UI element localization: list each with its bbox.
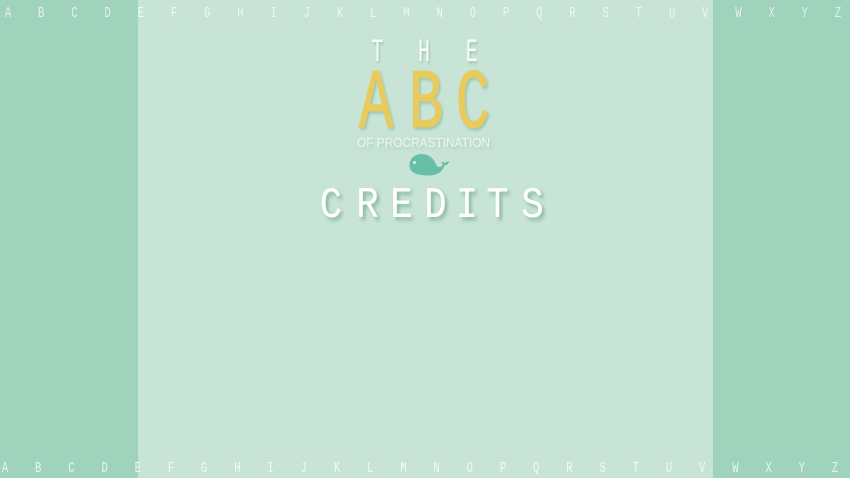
subtitle: of procrastination: OF PROCRASTINATION [357, 135, 490, 150]
alphabet strip: top: ABCDEFGHIJKLMNOPQRSTUVWXYZ [5, 4, 841, 22]
panel: center background [138, 0, 713, 478]
heading: credits: CREDITS [320, 181, 544, 231]
panel: left band [0, 0, 138, 478]
title: ABC: ABC [359, 57, 490, 153]
alphabet strip: bottom: ABCDEFGHIJKLMNOPQRSTUVWXYZ [2, 459, 838, 477]
panel: right band [713, 0, 850, 478]
icon: whale [410, 154, 450, 175]
title: THE: THE [372, 35, 478, 71]
